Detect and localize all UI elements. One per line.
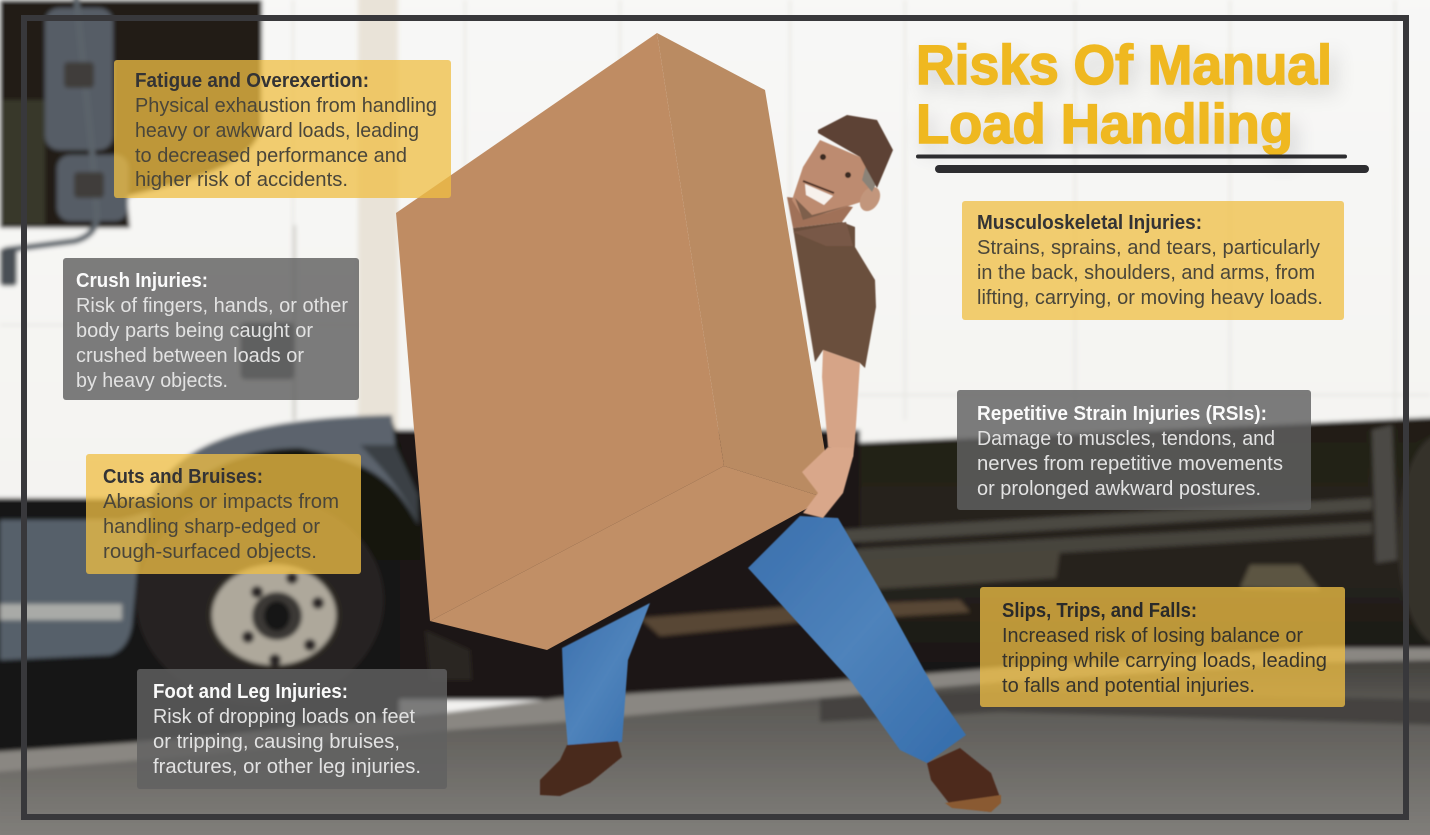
panel: slips, trips and falls: to falls and potential injuries. <box>1002 675 1255 697</box>
panel: fatigue and overexertion: higher risk of accidents. <box>135 169 348 191</box>
panel: musculoskeletal injuries: in the back, shoulders, and arms, from <box>977 262 1315 284</box>
title: Load Handling <box>916 92 1293 155</box>
panel: repetitive strain injuries: or prolonged awkward postures. <box>977 478 1261 500</box>
title: Risks Of Manual <box>916 33 1332 96</box>
panel: fatigue and overexertion: heavy or awkward loads, leading <box>135 120 419 142</box>
panel: fatigue and overexertion: Fatigue and Overexertion: <box>135 70 369 92</box>
road surface <box>0 650 1430 835</box>
panel: fatigue and overexertion: Physical exhaustion from handling <box>135 95 437 117</box>
left boot <box>540 741 622 796</box>
panel: crush injuries: Crush Injuries: <box>76 270 208 292</box>
panel: cuts and bruises <box>86 454 361 574</box>
head <box>792 115 893 220</box>
panel: crush injuries: crushed between loads or <box>76 345 304 367</box>
panel: cuts and bruises: Cuts and Bruises: <box>103 466 263 488</box>
fender <box>150 415 418 525</box>
panel: repetitive strain injuries: nerves from repetitive movements <box>977 453 1283 475</box>
neck <box>787 197 853 228</box>
box bottom face <box>430 466 826 650</box>
left jeans leg <box>562 603 650 748</box>
collar <box>793 222 853 246</box>
panel: foot and leg injuries <box>137 669 447 789</box>
panel: repetitive strain injuries: Damage to muscles, tendons, and <box>977 428 1275 450</box>
panel: fatigue and overexertion <box>114 60 451 198</box>
panel: musculoskeletal injuries: Strains, sprains, and tears, particularly <box>977 237 1320 259</box>
rear rails <box>840 498 1372 543</box>
panel: crush injuries <box>63 258 359 400</box>
panel: crush injuries: body parts being caught or <box>76 320 313 342</box>
title underlines <box>916 154 1369 173</box>
panel: foot and leg injuries: Foot and Leg Injuries: <box>153 681 348 703</box>
panel: foot and leg injuries: or tripping, causing bruises, <box>153 731 400 753</box>
panel: cuts and bruises: rough-surfaced objects. <box>103 541 317 563</box>
panel: foot and leg injuries: Risk of dropping loads on feet <box>153 706 415 728</box>
panel: musculoskeletal injuries: lifting, carrying, or moving heavy loads. <box>977 287 1323 309</box>
right jeans leg <box>748 516 966 763</box>
cap <box>818 115 893 188</box>
undercarriage dark area <box>850 417 1430 700</box>
panel: repetitive strain injuries: Repetitive Strain Injuries (RSIs): <box>977 403 1267 425</box>
arm <box>822 350 860 457</box>
right boot <box>927 748 1001 812</box>
door handle <box>240 322 295 380</box>
mirror assembly <box>45 8 113 150</box>
worker hand on box <box>802 447 853 518</box>
panel: musculoskeletal injuries <box>962 201 1344 320</box>
cab window <box>0 0 262 228</box>
panel: cuts and bruises: handling sharp-edged or <box>103 516 320 538</box>
title: Risks Of Manual <box>921 43 1339 107</box>
box front face <box>396 33 724 621</box>
panel: slips, trips and falls <box>980 587 1345 707</box>
panel: musculoskeletal injuries: Musculoskeletal Injuries: <box>977 212 1202 234</box>
panel: foot and leg injuries: fractures, or other leg injuries. <box>153 756 421 778</box>
cardboard box <box>396 33 828 650</box>
panel: slips, trips and falls: tripping while carrying loads, leading <box>1002 650 1327 672</box>
panel: slips, trips and falls: Increased risk of losing balance or <box>1002 625 1303 647</box>
truck body seams <box>0 0 1430 430</box>
panel: slips, trips and falls: Slips, Trips, and Falls: <box>1002 600 1197 622</box>
box side face <box>657 33 828 498</box>
panel: cuts and bruises: Abrasions or impacts from <box>103 491 339 513</box>
title <box>916 33 1339 166</box>
panel: fatigue and overexertion: to decreased performance and <box>135 145 407 167</box>
wheel <box>136 495 384 705</box>
panel: crush injuries: Risk of fingers, hands, or other <box>76 295 348 317</box>
bumper <box>0 512 150 660</box>
mouth <box>805 184 833 205</box>
panel: repetitive strain injuries <box>957 390 1311 510</box>
wheel well under fender <box>150 420 420 560</box>
brown shirt <box>793 222 876 368</box>
panel: crush injuries: by heavy objects. <box>76 370 228 392</box>
worker <box>540 115 1001 812</box>
title: Load Handling <box>921 102 1300 166</box>
